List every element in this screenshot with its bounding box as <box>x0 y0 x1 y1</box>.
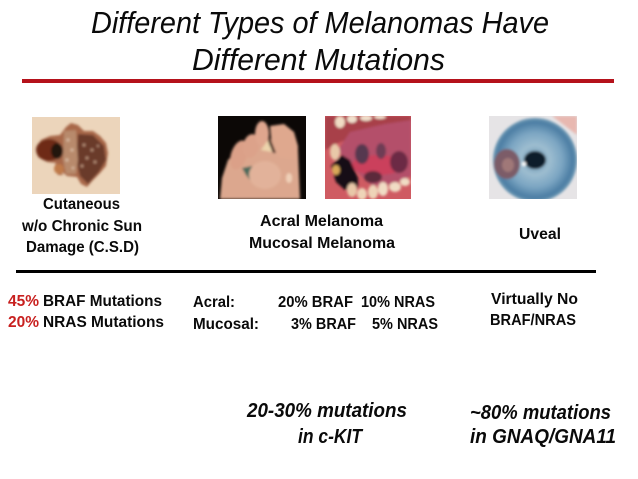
title underline <box>22 79 614 83</box>
column divider line <box>16 270 596 273</box>
title: Different Mutations <box>192 42 445 77</box>
acral and mucosal mutation rates: Mucosal: <box>193 316 259 333</box>
photo: mucosal melanoma in mouth <box>325 115 411 200</box>
title <box>91 5 549 77</box>
c-KIT callout: 20-30% mutations <box>246 400 407 422</box>
cutaneous mutation rates: BRAF Mutations <box>43 293 162 310</box>
GNAQ/GNA11 callout: in GNAQ/GNA11 <box>470 426 616 448</box>
title: Different Types of Melanomas Have <box>91 5 549 40</box>
acral and mucosal mutation rates: 5% NRAS <box>372 316 438 333</box>
label: acral and mucosal melanoma <box>249 213 395 252</box>
acral and mucosal mutation rates: 20% BRAF <box>278 294 353 311</box>
label: cutaneous: Damage (C.S.D) <box>26 239 139 256</box>
label: cutaneous <box>21 196 142 256</box>
photo: cutaneous melanoma <box>32 117 120 194</box>
label: uveal: Uveal <box>519 226 561 243</box>
acral and mucosal mutation rates: 3% BRAF <box>291 316 356 333</box>
acral and mucosal mutation rates: Acral: <box>193 294 235 311</box>
cutaneous mutation rates <box>8 293 164 331</box>
label: acral and mucosal melanoma: Mucosal Melanoma <box>249 235 395 252</box>
cutaneous mutation rates: 45% <box>8 293 39 310</box>
uveal mutation rates: Virtually No <box>491 291 578 308</box>
label: cutaneous: Cutaneous <box>43 196 120 213</box>
label: cutaneous: w/o Chronic Sun <box>21 218 142 235</box>
photo: acral melanoma on foot <box>218 116 306 199</box>
acral and mucosal mutation rates: 10% NRAS <box>361 294 435 311</box>
label: acral and mucosal melanoma: Acral Melanoma <box>260 213 383 230</box>
cutaneous mutation rates: NRAS Mutations <box>43 314 164 331</box>
c-KIT callout <box>246 400 407 448</box>
uveal mutation rates <box>490 291 578 329</box>
uveal mutation rates: BRAF/NRAS <box>490 312 576 329</box>
acral and mucosal mutation rates <box>193 294 438 333</box>
GNAQ/GNA11 callout <box>470 402 616 448</box>
cutaneous mutation rates: 20% <box>8 314 39 331</box>
c-KIT callout: in c-KIT <box>298 426 364 448</box>
photo: uveal melanoma in iris <box>489 116 577 202</box>
GNAQ/GNA11 callout: ~80% mutations <box>470 402 611 424</box>
